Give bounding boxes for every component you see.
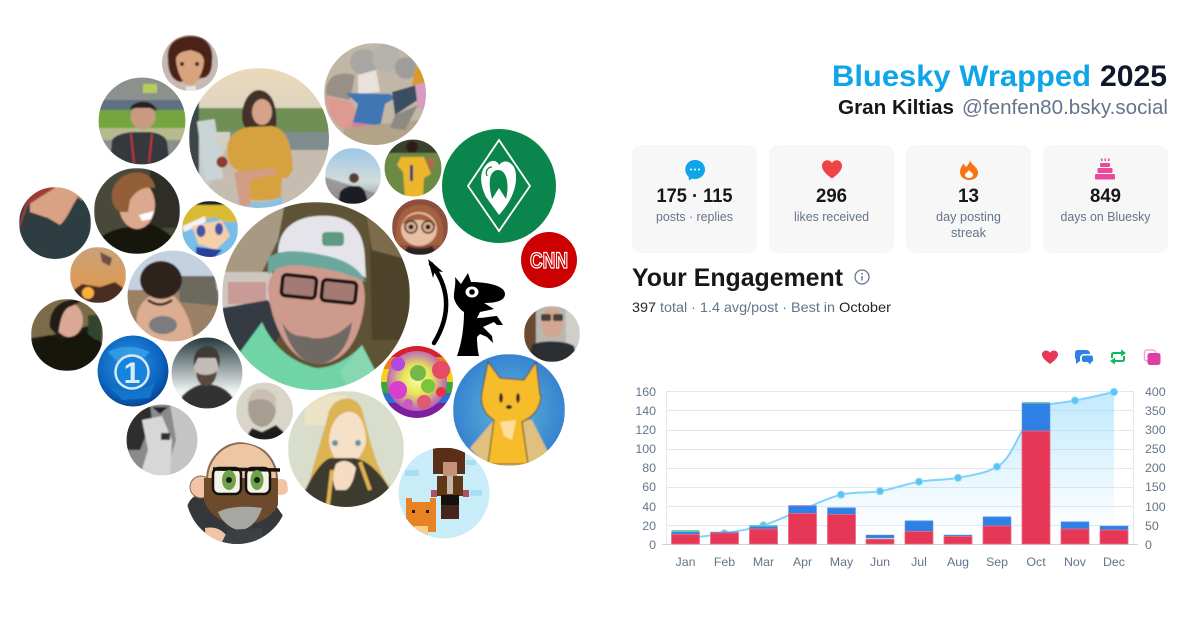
icon: flame xyxy=(960,160,978,180)
panel: header xyxy=(832,60,1168,119)
month labels: Apr xyxy=(793,555,812,569)
panel: stat posts and replies xyxy=(632,145,757,253)
arrow: tail pointing up xyxy=(428,259,446,343)
right axis labels: 50 xyxy=(1145,519,1159,533)
right axis labels: 300 xyxy=(1145,423,1166,437)
avatar: main man in green hoodie xyxy=(222,202,410,392)
title: Bluesky Wrapped xyxy=(832,60,1091,93)
avatar: woman in black xyxy=(31,299,103,371)
stat label: posts · replies xyxy=(656,210,733,224)
avatar: man in yellow number one jersey xyxy=(384,139,442,197)
stat label: likes received xyxy=(794,210,869,224)
chart: monthly engagement with cumulative line xyxy=(635,385,1166,569)
chart legend icons xyxy=(1042,350,1160,365)
right axis labels: 100 xyxy=(1145,500,1166,514)
avatar: woman in yellow sweater xyxy=(189,68,330,210)
engagement summary: total · 1.4 avg/post · Best in xyxy=(660,299,835,315)
avatar: man in stadium xyxy=(98,77,186,165)
engagement summary: October xyxy=(839,299,891,315)
left axis labels: 160 xyxy=(635,385,656,399)
month labels: Jul xyxy=(911,555,927,569)
left axis labels: 60 xyxy=(642,480,656,494)
stat label: day posting xyxy=(936,210,1001,224)
icon: heart xyxy=(822,160,842,178)
month labels: Feb xyxy=(714,555,735,569)
avatar: yellow fox xyxy=(453,354,565,466)
month labels: Nov xyxy=(1064,555,1087,569)
month labels: Jun xyxy=(870,555,890,569)
avatar: pixel-art farmer with cat xyxy=(398,447,490,539)
left axis labels: 0 xyxy=(649,538,656,552)
panel: avatar bubble cluster xyxy=(19,33,580,548)
left axis labels: 80 xyxy=(642,461,656,475)
avatar: talking man in dark t-shirt xyxy=(524,306,580,362)
icon: cake xyxy=(1095,158,1115,180)
left axis labels: 100 xyxy=(635,442,656,456)
avatar: tagesschau globe xyxy=(98,336,168,406)
avatar: tagesschau globe: 1 xyxy=(124,357,140,390)
stat value: 849 xyxy=(1090,186,1121,207)
icon: info xyxy=(855,270,869,284)
icon: legend chat bubbles xyxy=(1075,350,1093,364)
stat label: days on Bluesky xyxy=(1060,210,1151,224)
left axis labels: 140 xyxy=(635,404,656,418)
panel: stat streak xyxy=(906,145,1031,253)
avatar: sunset xyxy=(70,247,126,303)
title year: 2025 xyxy=(1100,60,1167,93)
avatar: rainbow flower ball xyxy=(381,346,453,418)
avatar: tiny 3D girl with glasses xyxy=(392,199,448,255)
left axis labels: 20 xyxy=(642,519,656,533)
avatar: CNN logo: CNN xyxy=(530,248,568,273)
avatar: smiling short-haired woman xyxy=(94,168,180,254)
stat value: 175 · 115 xyxy=(656,186,733,207)
cumulative area xyxy=(686,392,1114,544)
icon: legend quote squares xyxy=(1144,350,1160,365)
month labels: Jan xyxy=(676,555,696,569)
right axis labels: 200 xyxy=(1145,461,1166,475)
right axis labels: 250 xyxy=(1145,442,1166,456)
avatar: black and white hand xyxy=(126,404,198,476)
handle: @fenfen80.bsky.social xyxy=(962,97,1168,119)
left axis labels: 40 xyxy=(642,500,656,514)
heading: your engagement: Your Engagement xyxy=(632,264,844,292)
avatar: dark lace xyxy=(19,187,91,260)
month labels: Sep xyxy=(986,555,1008,569)
panel: stat days xyxy=(1043,145,1168,253)
right axis labels xyxy=(1145,385,1166,552)
engagement summary: 397 xyxy=(632,299,656,315)
icon: speech bubble xyxy=(685,160,705,180)
month labels: Mar xyxy=(753,555,774,569)
stat value: 13 xyxy=(958,186,979,207)
avatar: bearded man black and white xyxy=(171,337,243,409)
icon: legend repost arrows xyxy=(1110,350,1126,364)
avatar: Werder crest xyxy=(442,129,556,243)
avatar: watercolour cats xyxy=(324,43,428,148)
right axis labels: 400 xyxy=(1145,385,1166,399)
mascot: black creature xyxy=(454,273,505,356)
avatar: blonde anime woman xyxy=(288,391,404,510)
month labels: Aug xyxy=(947,555,969,569)
panel: stat likes xyxy=(769,145,894,253)
avatar: elephant tattoo xyxy=(127,250,219,342)
icon: legend heart xyxy=(1042,350,1058,364)
cumulative line xyxy=(686,392,1114,538)
line markers xyxy=(721,388,1118,537)
month labels xyxy=(676,555,1125,569)
stacked bars xyxy=(672,402,1128,544)
avatar: bald man sepia xyxy=(236,382,294,440)
display name: Gran Kiltias xyxy=(838,97,954,119)
avatar: anime boy xyxy=(182,201,238,258)
right axis labels: 350 xyxy=(1145,404,1166,418)
avatar: person looking at the sea xyxy=(325,148,381,204)
month labels: Oct xyxy=(1026,555,1046,569)
right axis labels: 0 xyxy=(1145,538,1152,552)
stat label line two: streak xyxy=(951,226,987,240)
stat value: 296 xyxy=(816,186,847,207)
left axis labels: 120 xyxy=(635,423,656,437)
month labels: May xyxy=(830,555,854,569)
avatar: illustrated girl xyxy=(162,35,218,91)
engagement summary xyxy=(632,299,891,315)
left axis labels xyxy=(635,385,656,552)
avatar: CNN logo xyxy=(521,232,577,288)
month labels: Dec xyxy=(1103,555,1125,569)
avatar: cartoon bald man with glasses xyxy=(186,442,289,548)
right axis labels: 150 xyxy=(1145,480,1166,494)
